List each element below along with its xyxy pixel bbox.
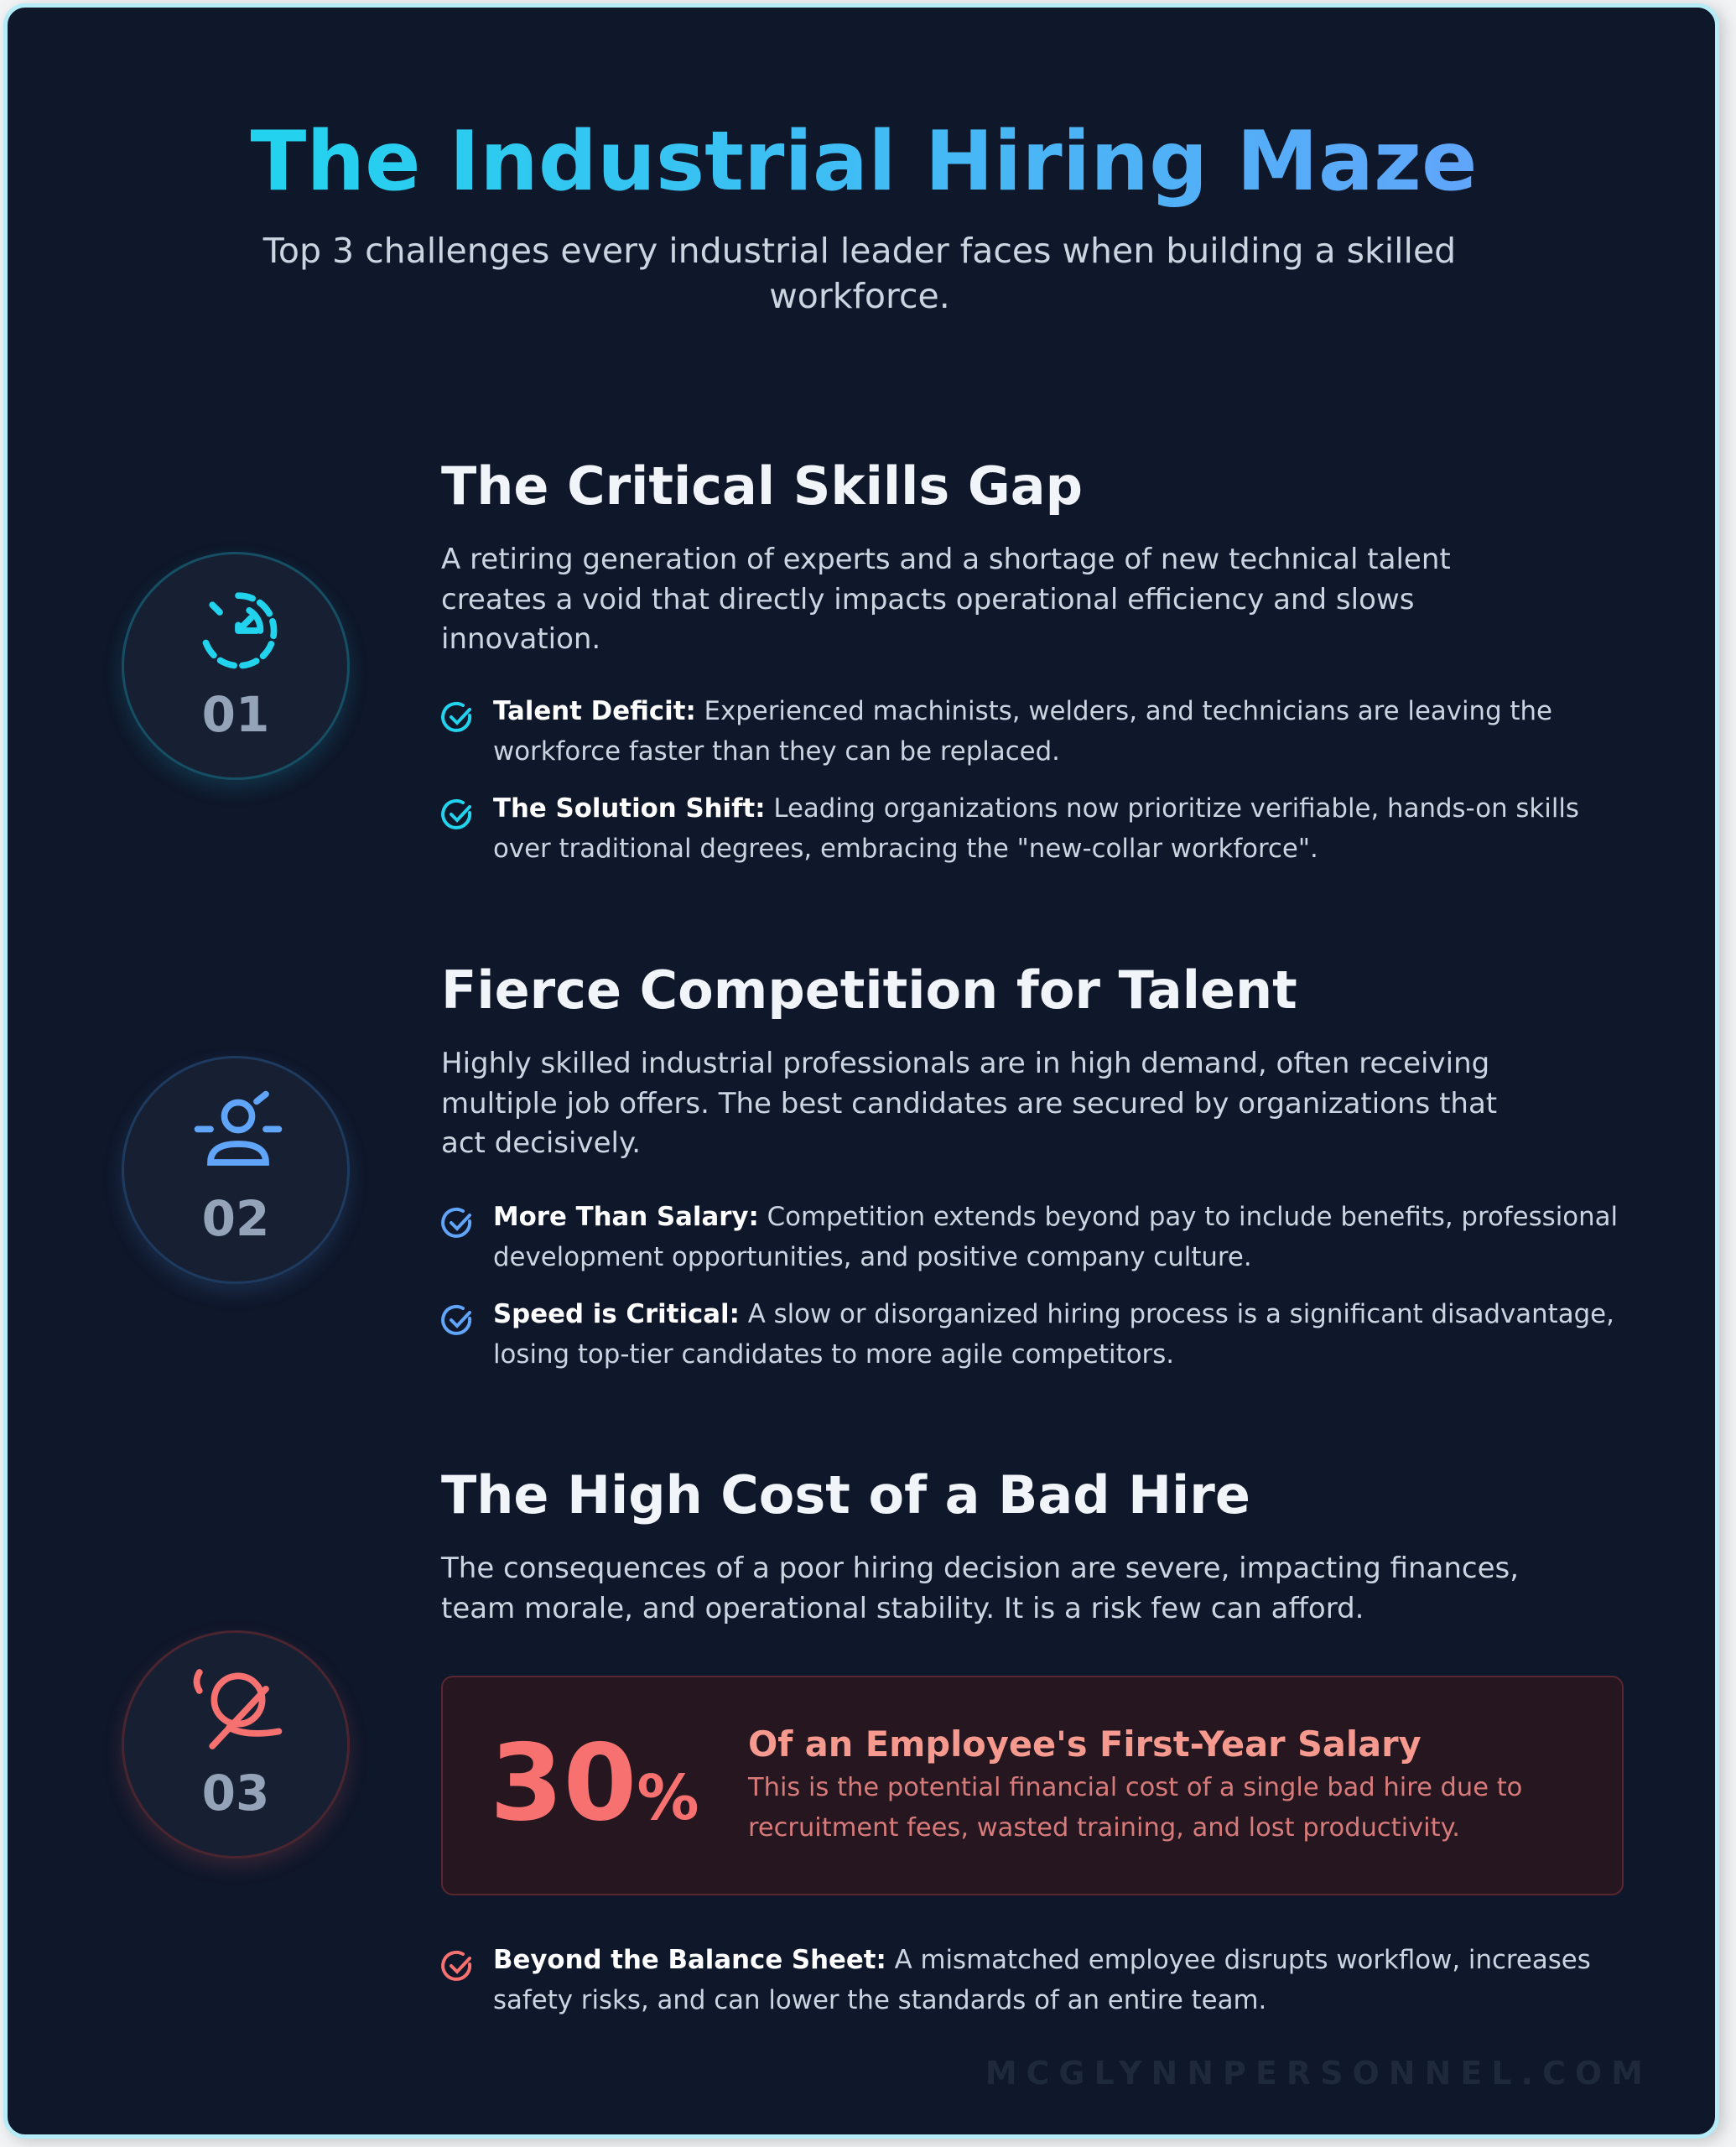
bullet 1a: workforce faster than they can be replaced.	[493, 736, 1060, 767]
stat description: recruitment fees, wasted training, and lost productivity.	[748, 1813, 1460, 1842]
stat description: This is the potential financial cost of a single bad hire due to	[748, 1773, 1522, 1802]
paragraph 3: The consequences of a poor hiring decision are severe, impacting finances,	[441, 1552, 1519, 1585]
heading 3: The High Cost of a Bad Hire	[441, 1464, 1250, 1526]
paragraph 1: creates a void that directly impacts operational efficiency and slows	[441, 582, 1414, 616]
icon: clock	[203, 592, 277, 669]
bullet 1b: over traditional degrees, embracing the "new-collar workforce".	[493, 834, 1318, 864]
subtitle	[263, 231, 1456, 316]
footer url: MCGLYNNPERSONNEL.COM	[985, 2055, 1652, 2092]
stat heading: Of an Employee's First-Year Salary	[748, 1723, 1422, 1765]
paragraph 3	[441, 1552, 1519, 1625]
bullet 2b	[441, 1299, 1614, 1369]
number 02: 02	[202, 1190, 269, 1247]
paragraph 2	[441, 1047, 1497, 1160]
heading 1: The Critical Skills Gap	[441, 455, 1083, 517]
stat 30%: 30%	[490, 1721, 699, 1844]
bullet 2a: development opportunities, and positive company culture.	[493, 1241, 1252, 1271]
bullet 3	[441, 1945, 1591, 2014]
section 3 circle	[122, 1630, 350, 1858]
paragraph 1: innovation.	[441, 622, 600, 656]
bullet 2b: losing top-tier candidates to more agile competitors.	[493, 1339, 1174, 1369]
icon: crossed coin	[193, 1669, 282, 1749]
paragraph 2: multiple job offers. The best candidates are secured by organizations that	[441, 1087, 1497, 1120]
bullet 1b: The Solution Shift: Leading organizations now prioritize verifiable, hands-on skills	[493, 793, 1579, 824]
bullet 2a	[441, 1202, 1618, 1271]
number 03: 03	[202, 1765, 269, 1822]
bullet 3: safety risks, and can lower the standards of an entire team.	[493, 1984, 1266, 2014]
bullet 2b: Speed is Critical: A slow or disorganized hiring process is a significant disadvantage,	[493, 1299, 1614, 1329]
icon: person	[195, 1090, 282, 1166]
subtitle: workforce.	[769, 276, 950, 316]
bullet 3: Beyond the Balance Sheet: A mismatched employee disrupts workflow, increases	[493, 1945, 1591, 1975]
paragraph 1	[441, 543, 1451, 656]
bullet 1a: Talent Deficit: Experienced machinists, welders, and technicians are leaving the	[493, 696, 1552, 726]
paragraph 2: act decisively.	[441, 1126, 641, 1160]
number 01: 01	[202, 686, 269, 743]
paragraph 2: Highly skilled industrial professionals are in high demand, often receiving	[441, 1047, 1489, 1080]
callout: 30%	[441, 1676, 1624, 1895]
section 1 circle	[122, 552, 350, 780]
bullet 1b	[441, 793, 1579, 864]
bullet 1a	[441, 696, 1552, 767]
paragraph 3: team morale, and operational stability. It is a risk few can afford.	[441, 1592, 1364, 1625]
title: The Industrial Hiring Maze	[250, 114, 1478, 210]
paragraph 1: A retiring generation of experts and a shortage of new technical talent	[441, 543, 1451, 576]
bullet 2a: More Than Salary: Competition extends beyond pay to include benefits, professional	[493, 1202, 1618, 1232]
subtitle: Top 3 challenges every industrial leader faces when building a skilled	[263, 231, 1456, 271]
stat description	[748, 1773, 1522, 1842]
section 2 circle	[122, 1056, 350, 1284]
heading 2: Fierce Competition for Talent	[441, 959, 1297, 1021]
